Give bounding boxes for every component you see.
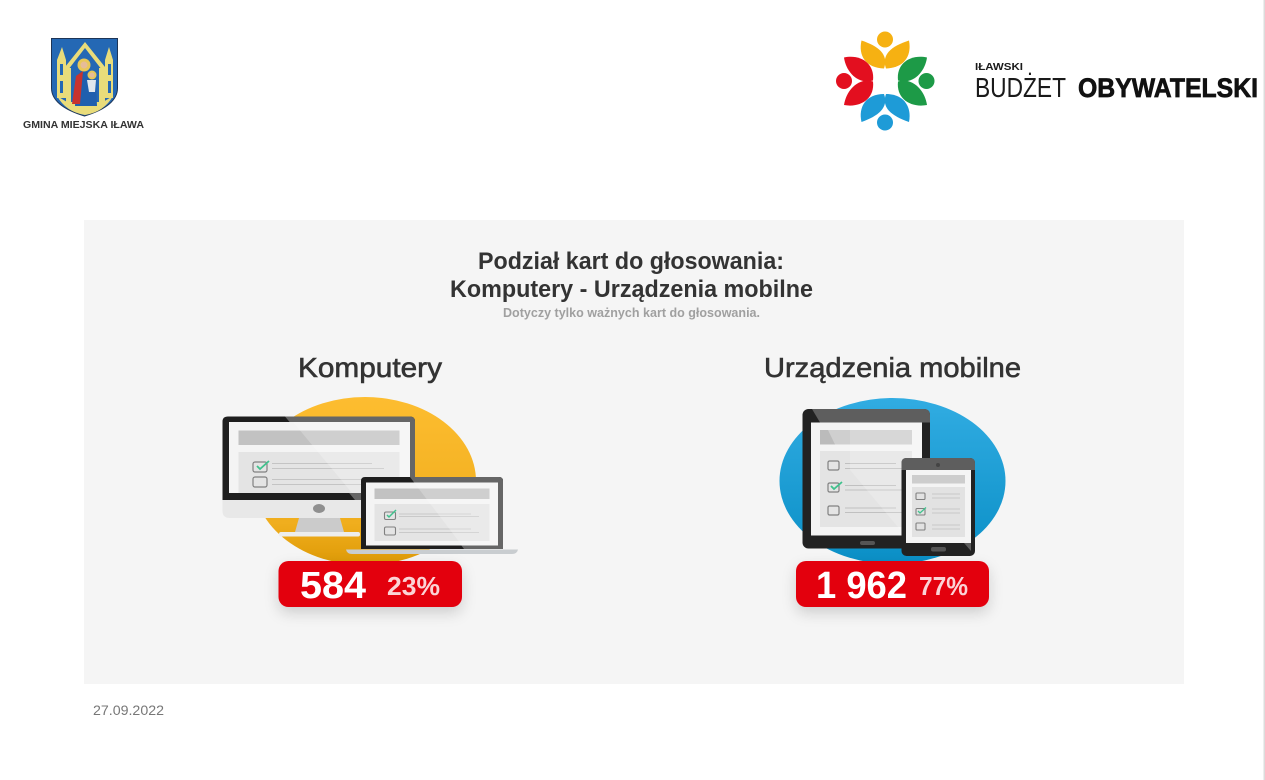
icon: yellow circle backdrop — [254, 397, 476, 565]
value: 584: 584 — [300, 565, 366, 607]
subtitle note: Dotyczy tylko ważnych kart do głosowania. — [503, 306, 760, 320]
badge: mobile count — [796, 561, 989, 607]
heading: Urządzenia mobilne: Urządzenia mobilne — [764, 352, 1021, 383]
heading: title line 2: Komputery - Urządzenia mobilne — [450, 276, 813, 303]
label: Gmina Miejska Iława: GMINA MIEJSKA IŁAWA — [23, 119, 144, 131]
column: computers — [222, 352, 518, 607]
panel: voting cards split — [84, 220, 1184, 684]
icon: laptop — [346, 477, 518, 554]
glare — [850, 422, 922, 536]
logo: Gmina Miejska Iława — [23, 38, 144, 131]
wordmark: Iławski: IŁAWSKI — [975, 61, 1023, 73]
badge: computers count — [278, 561, 462, 607]
value: 23%: 23% — [387, 571, 440, 601]
icon: blue circle backdrop — [780, 398, 1006, 564]
glare — [414, 482, 498, 546]
icon: desktop monitor — [222, 416, 415, 536]
logo: Iławski Budżet Obywatelski — [836, 32, 1258, 130]
glare — [293, 422, 410, 493]
heading: Komputery: Komputery — [298, 352, 442, 383]
icon: flower emblem — [836, 32, 934, 130]
icon: smartphone — [902, 458, 975, 556]
icon: coat of arms shield — [52, 38, 118, 116]
column: mobile devices — [764, 352, 1021, 607]
wordmark: Budżet: BUDŻET — [975, 72, 1066, 103]
date: 27.09.2022 — [93, 703, 164, 718]
value: 1 962: 1 962 — [816, 565, 907, 607]
value: 77%: 77% — [919, 571, 968, 601]
icon: tablet — [802, 409, 930, 548]
heading: title line 1: Podział kart do głosowania: — [478, 248, 784, 275]
